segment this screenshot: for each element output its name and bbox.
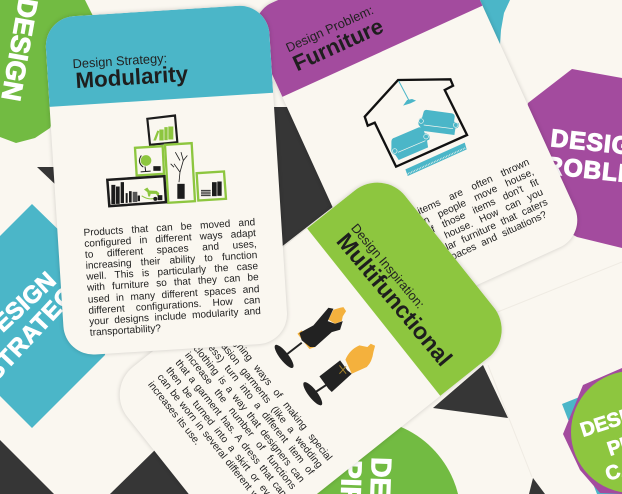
icon: dress forms bbox=[274, 307, 376, 406]
panel: teal hexagon strategy bbox=[0, 204, 110, 428]
text: multifunctional description bbox=[145, 321, 334, 494]
panel: dark triangles bbox=[0, 107, 545, 494]
heading: Design Strategy: Design Strategy: bbox=[72, 50, 168, 71]
panel: green circle inspiration bbox=[263, 413, 461, 494]
text: modularity description: transportability? bbox=[90, 323, 161, 338]
text: modularity description: used in many different spaces and bbox=[87, 283, 260, 305]
text: modularity description: increasing their ability to function bbox=[85, 250, 258, 271]
text: furniture description: to different spaces and situations? bbox=[393, 210, 548, 289]
heading: Furniture: Furniture bbox=[288, 13, 387, 76]
panel: purple hexagon problem bbox=[510, 69, 622, 248]
panel: Design Strategy Modularity card bbox=[44, 3, 289, 356]
text: modularity description: your designs include modularity and bbox=[89, 305, 261, 327]
text: modularity description bbox=[83, 216, 261, 338]
panel: Design Problem Furniture card bbox=[245, 0, 587, 326]
panel: lower right card edges bbox=[488, 262, 622, 477]
text: modularity description: different configurations. How can bbox=[88, 294, 260, 316]
text: furniture description bbox=[370, 157, 549, 289]
text: modularity description: to different spaces and uses, bbox=[85, 238, 257, 260]
text: furniture description: in the new house. How can you bbox=[384, 187, 545, 269]
panel: badge bottom right bbox=[562, 368, 622, 494]
text: multifunctional description: Designing ways of making special bbox=[218, 321, 334, 463]
heading: Modularity: Modularity bbox=[75, 60, 189, 92]
text: furniture description: away when people move house, bbox=[374, 167, 535, 248]
text: furniture description: especially if those items don't fit bbox=[379, 177, 540, 258]
header band bbox=[44, 3, 273, 106]
text: modularity description: Products that can be moved and bbox=[83, 216, 256, 238]
panel: green card top left bbox=[0, 0, 95, 171]
text: furniture description: design modular furniture that caters bbox=[388, 197, 549, 279]
icon: house with sofas bbox=[363, 78, 469, 176]
heading: Multifunctional: Multifunctional bbox=[331, 228, 457, 371]
text: multifunctional description: clothing is a way that designers can bbox=[191, 343, 306, 484]
text: furniture description: Furniture items are often thrown bbox=[370, 157, 531, 238]
panel: Design Inspiration Multifunctional card bbox=[105, 168, 516, 494]
text: multifunctional description: increase the number of functions bbox=[182, 350, 297, 492]
icon: modular shelves bbox=[106, 114, 228, 208]
header band bbox=[245, 0, 482, 97]
text: modularity description: configured in different ways adapt bbox=[84, 227, 256, 249]
text: multifunctional description: increases its use. bbox=[145, 379, 203, 447]
panel: teal strip top right bbox=[470, 0, 510, 45]
text: modularity description: well. This is particularly the case bbox=[86, 261, 258, 283]
heading: Design Inspiration: Design Inspiration: bbox=[348, 220, 428, 311]
header band bbox=[307, 168, 516, 395]
text: modularity description: with furniture so that they can be bbox=[87, 272, 259, 294]
text: multifunctional description: dress) turn into a different item of bbox=[200, 336, 316, 477]
heading: Design Problem: Design Problem: bbox=[283, 2, 375, 55]
text: multifunctional description: occasion garments (like a wedding bbox=[209, 329, 325, 470]
